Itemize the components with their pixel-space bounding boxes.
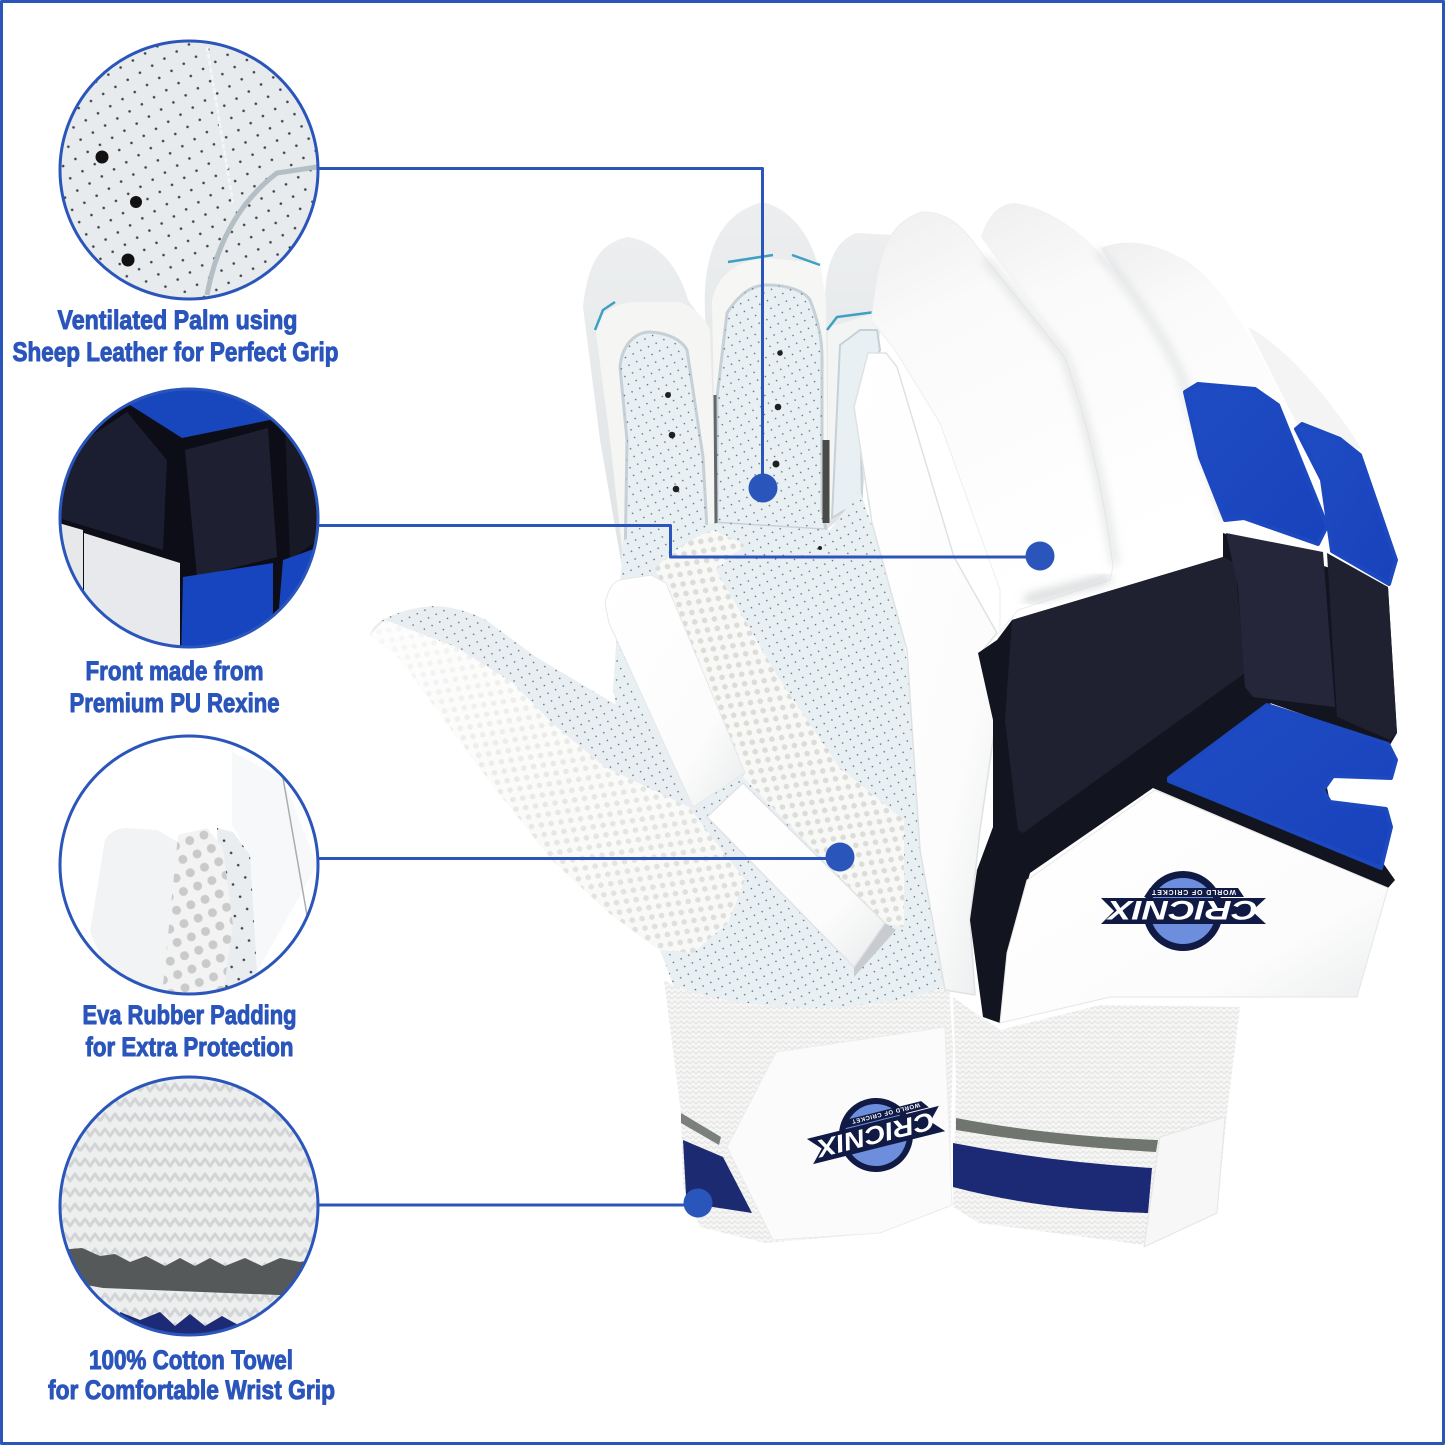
marker dot (826, 842, 854, 872)
photo circle: towel knit (59, 1076, 319, 1340)
front glove: back-of-hand view (854, 203, 1400, 1247)
ventilation holes (665, 350, 914, 700)
wrist towel (953, 997, 1240, 1245)
finger rolls (871, 203, 1362, 632)
finger guard pads (605, 575, 896, 977)
wrist logo: CRICNIX (813, 1106, 937, 1162)
connector line (319, 168, 762, 487)
connector line (319, 857, 840, 860)
caption: Sheep Leather for Perfect Grip (12, 337, 338, 367)
thumb (370, 606, 745, 953)
marker dot (748, 474, 778, 502)
photo circle: pad close-up (58, 388, 320, 648)
main logo: WORLD OF CRICKET (1151, 888, 1236, 895)
caption: for Comfortable Wrist Grip (48, 1375, 335, 1405)
connector line (319, 1204, 698, 1206)
wrist logo (801, 1083, 951, 1187)
mesh strip (655, 530, 904, 927)
wrist tab (727, 1027, 952, 1240)
connector line (319, 526, 1040, 557)
back glove: palm view (370, 202, 953, 1243)
photo circle: padding and mesh (59, 735, 319, 995)
callout 3: EVA padding (59, 735, 854, 1062)
index side panel (854, 353, 997, 995)
navy hand pads (1005, 533, 1397, 833)
wrist stripes (953, 1118, 1158, 1213)
fingers (583, 202, 892, 580)
palm leather (613, 490, 945, 1015)
caption: Ventilated Palm using (58, 305, 298, 335)
marker dot (684, 1188, 712, 1218)
photo circle: perforated palm (59, 40, 319, 300)
wrist strap (1144, 1117, 1225, 1247)
blue thumb guard (1169, 705, 1396, 868)
blue finger protectors (1185, 384, 1396, 584)
callout 2: PU rexine front (55, 370, 1054, 718)
main logo (1101, 871, 1266, 951)
caption: Premium PU Rexine (70, 688, 280, 718)
marker dot (1026, 542, 1054, 570)
callout 4: cotton towel (48, 1076, 712, 1405)
caption: 100% Cotton Towel (89, 1345, 293, 1375)
wrist logo: WORLD OF CRICKET (851, 1101, 921, 1124)
navy underlay (970, 533, 1397, 1023)
main logo: CRICNIX (1105, 895, 1258, 925)
callout 1: ventilated palm (12, 40, 778, 502)
caption: for Extra Protection (86, 1032, 294, 1062)
wrist stripes (681, 1113, 752, 1213)
caption: Eva Rubber Padding (82, 1000, 296, 1030)
slot behind blue thumb guard (1325, 775, 1400, 812)
white lower guard (1000, 790, 1388, 1023)
wrist towel (664, 980, 953, 1243)
caption: Front made from (86, 656, 264, 686)
